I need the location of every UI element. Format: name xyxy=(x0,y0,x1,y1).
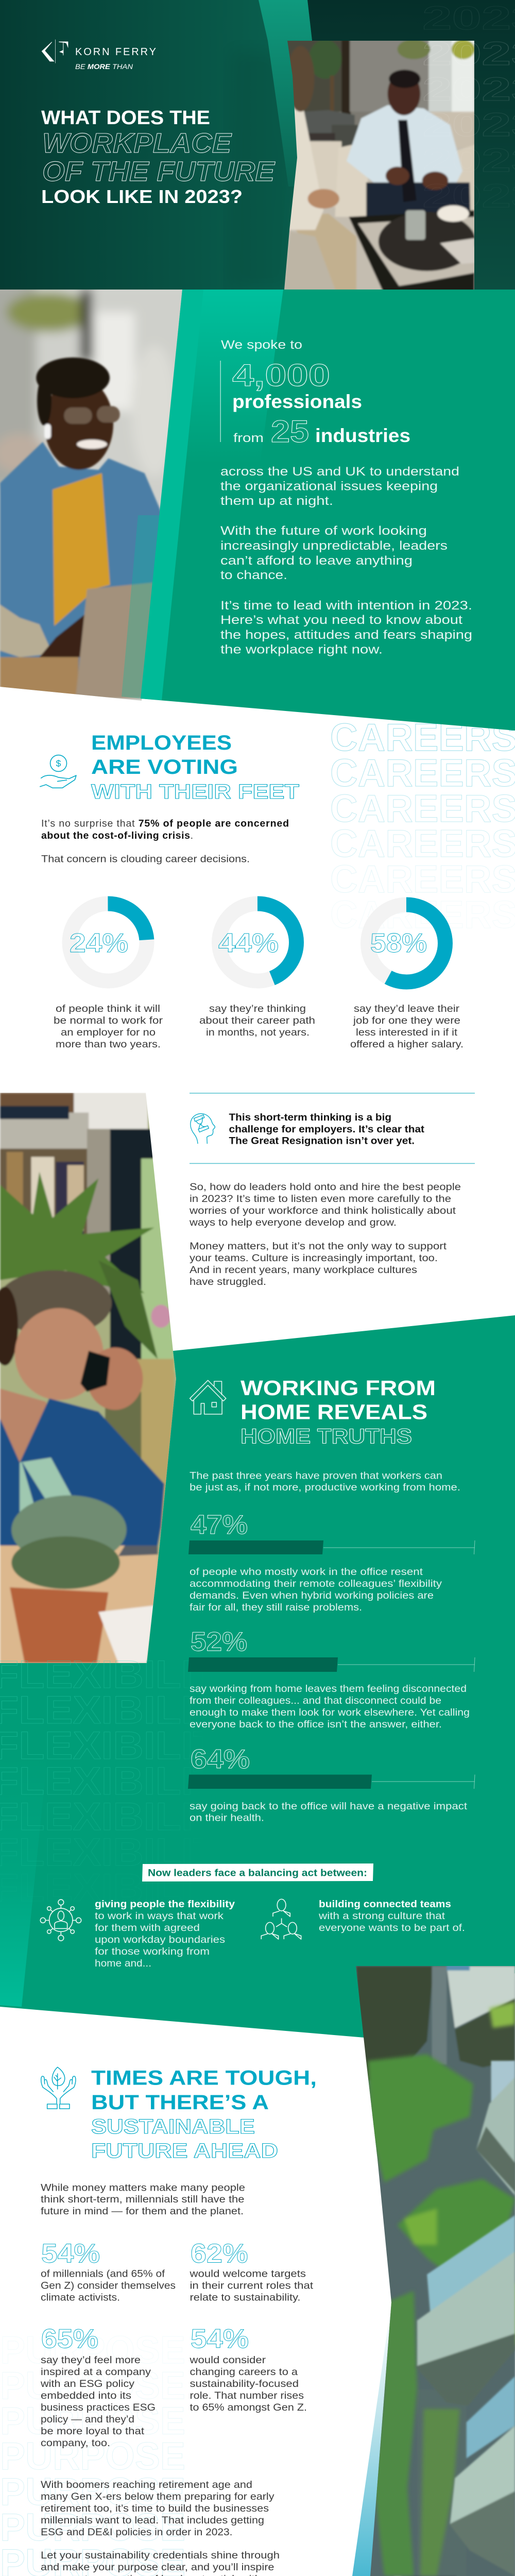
background word pattern: 2023: 2023 xyxy=(422,0,515,37)
intro text: increasingly unpredictable, leaders xyxy=(220,539,448,553)
stat: 54% changing careers xyxy=(189,2324,307,2413)
stat: 62% sustainability targets: in their current roles that xyxy=(190,2280,314,2292)
heading xyxy=(91,2067,317,2162)
title: WORKPLACE xyxy=(42,128,232,159)
intro teal wedge xyxy=(165,290,283,464)
donut chart: 58%: 58% xyxy=(370,928,427,958)
green background xyxy=(0,1315,515,2038)
text block: intro: future in mind — for them and the planet. xyxy=(41,2206,244,2217)
text block: holding onto the best people xyxy=(189,1181,461,1287)
stat: 65% ESG policy: embedded into its xyxy=(41,2390,131,2401)
stat: 54% climate activists: Gen Z) consider themselves xyxy=(41,2280,176,2292)
background word pattern: FLEXIBILITY xyxy=(0,1653,247,1910)
background word pattern: CAREERS: CAREERS xyxy=(330,893,515,936)
icon: hand holding a coin xyxy=(40,755,76,788)
intro text xyxy=(220,338,472,656)
text block: holding onto the best people: your teams. Culture is increasingly important, too. xyxy=(190,1252,438,1264)
stat: 65% ESG policy: be more loyal to that xyxy=(41,2426,145,2437)
donut chart: 44% xyxy=(218,904,297,981)
intro text: Here’s what you need to know about xyxy=(220,613,462,627)
background word pattern: 2023: 2023 xyxy=(422,106,515,143)
bar stat: 52%: everyone back to the office isn’t the answer, either. xyxy=(190,1719,442,1730)
background word pattern: 2023: 2023 xyxy=(422,35,515,72)
caption: 58%: say they’d leave their xyxy=(354,1003,460,1014)
bar stat: 64%: on their health. xyxy=(190,1812,264,1824)
panel: employees are voting xyxy=(40,732,464,1050)
bar stat: 64% xyxy=(188,1744,475,1824)
photo: green building with balconies xyxy=(345,1962,515,2576)
callout: great resignation: This short-term thinking is a big xyxy=(229,1112,391,1123)
title: OF THE FUTURE xyxy=(42,156,276,187)
caption: 58%: less interested in if it xyxy=(356,1027,458,1038)
text block: intro: While money matters make many people xyxy=(41,2182,245,2194)
balconies and glass xyxy=(416,2061,515,2576)
callout: great resignation: challenge for employers. It’s clear that xyxy=(229,1124,425,1135)
background word pattern: 2023 xyxy=(422,0,515,214)
intro text: the workplace right now. xyxy=(220,643,383,656)
icon: hand holding a coin: $ xyxy=(56,758,61,769)
blurred background xyxy=(0,290,182,701)
donut chart: 44%: 44% xyxy=(218,928,279,958)
background word pattern: CAREERS: CAREERS xyxy=(330,716,515,759)
bar stat: 47%: of people who mostly work in the office resent xyxy=(190,1566,423,1578)
title: WHAT DOES THE xyxy=(41,107,210,129)
icon: KF mark xyxy=(42,40,68,63)
panel: short-term thinking xyxy=(189,1093,475,1287)
stat: 65% ESG policy: say they’d feel more xyxy=(41,2354,141,2366)
stat: 65% ESG policy xyxy=(40,2324,156,2449)
donut chart: 24% xyxy=(70,904,147,981)
donut chart: 24%: 24% xyxy=(70,928,128,958)
stat: 54% changing careers: changing careers to a xyxy=(190,2366,298,2378)
background word pattern: PURPOSE: PURPOSE xyxy=(0,2505,185,2549)
stat: 54% changing careers: would consider xyxy=(189,2354,266,2366)
stat: 54% changing careers: sustainability-focused xyxy=(190,2378,299,2389)
intro teal strip xyxy=(141,290,203,700)
stat: 54% climate activists: 54% xyxy=(41,2239,100,2269)
hero teal strip xyxy=(259,0,312,187)
callout: great resignation: The Great Resignation isn’t over yet. xyxy=(229,1136,415,1147)
text: connected teams: building connected teams xyxy=(319,1899,451,1910)
stat: 54% climate activists: of millennials (and 65% of xyxy=(41,2268,165,2279)
text block: closing: and make your purpose clear, and you’ll inspire xyxy=(41,2562,274,2573)
bar stat: 52%: from their colleagues... and that disconnect could be xyxy=(190,1695,441,1706)
panel: hero xyxy=(0,0,515,291)
text block: closing xyxy=(41,2479,280,2576)
text block: holding onto the best people: in 2023? It’s time to listen even more carefully to the xyxy=(190,1193,451,1205)
heading: HOME REVEALS xyxy=(241,1400,427,1424)
icon: head with hourglass xyxy=(191,1114,215,1144)
hero background xyxy=(0,0,515,290)
intro text: can’t afford to leave anything xyxy=(220,554,413,568)
heading: ARE VOTING xyxy=(91,756,238,778)
heading: WORKING FROM xyxy=(241,1376,436,1400)
icon: house xyxy=(190,1380,226,1414)
caption: 44%: say they’re thinking xyxy=(209,1003,306,1014)
background word pattern: PURPOSE: PURPOSE xyxy=(0,2364,185,2407)
stat: 54% changing careers: to 65% amongst Gen Z. xyxy=(190,2402,307,2413)
background word pattern: PURPOSE: PURPOSE xyxy=(0,2328,185,2371)
intro text: the hopes, attitudes and fears shaping xyxy=(220,628,472,642)
text: connected teams xyxy=(318,1899,465,1934)
stat: 65% ESG policy: 65% xyxy=(41,2324,98,2354)
stat: 65% ESG policy: policy — and they’d xyxy=(41,2414,134,2425)
glass strip over the photo xyxy=(122,515,160,699)
caption: 44%: in months, not years. xyxy=(206,1027,310,1038)
icon: network around a person xyxy=(40,1900,81,1941)
heading: BUT THERE’S A xyxy=(91,2091,269,2114)
intro paragraph: about the cost-of-living crisis. xyxy=(41,830,193,841)
panel: sustainable future xyxy=(40,2067,317,2576)
text: flexibility: upon workday boundaries xyxy=(95,1934,225,1945)
stat: 62% sustainability targets: 62% xyxy=(191,2239,248,2269)
panel: intro xyxy=(0,282,515,731)
background word pattern: CAREERS: CAREERS xyxy=(330,787,515,830)
background word pattern: 2023: 2023 xyxy=(422,142,515,179)
stat: 65% ESG policy: company, too. xyxy=(41,2437,110,2449)
hero dark top right background xyxy=(307,0,515,290)
intro paragraph: It’s no surprise that 75% of people are concerned xyxy=(41,818,289,829)
text block: closing: retirement too, it’s time to build the businesses xyxy=(41,2503,269,2514)
background word pattern: PURPOSE: PURPOSE xyxy=(0,2434,185,2478)
caption: 58%: offered a higher salary. xyxy=(350,1039,464,1050)
text block: closing: many Gen X-ers below them preparing for early xyxy=(41,2491,274,2502)
title: LOOK LIKE IN 2023? xyxy=(41,186,243,207)
bar stat: 52% xyxy=(188,1627,475,1730)
bar stat: 47%: accommodating their remote colleagues’ flexibility xyxy=(190,1578,442,1589)
bar stat: 47%: demands. Even when hybrid working policies are xyxy=(190,1590,434,1601)
background word pattern: PURPOSE: PURPOSE xyxy=(0,2399,185,2442)
background word pattern: PURPOSE xyxy=(0,2328,185,2576)
background word pattern: 2023: 2023 xyxy=(422,71,515,108)
callout: great resignation xyxy=(190,1093,475,1164)
caption: 24%: an employer for no xyxy=(61,1027,156,1038)
heading: EMPLOYEES xyxy=(91,732,232,754)
intro text: across the US and UK to understand xyxy=(220,465,459,479)
background word pattern: CAREERS xyxy=(330,716,515,936)
bar stat: 47%: fair for all, they still raise problems. xyxy=(190,1602,362,1613)
ghosted figure behind the title xyxy=(227,52,299,289)
caption: 44% xyxy=(199,1003,315,1038)
stat: from 25 industries: from xyxy=(233,431,264,445)
bar stat: 52%: say working from home leaves them feeling disconnected xyxy=(190,1683,467,1694)
text block: intro xyxy=(41,2182,245,2217)
text: flexibility: for them with agreed xyxy=(95,1922,200,1934)
bar stat: 47% xyxy=(188,1510,475,1613)
heading: SUSTAINABLE xyxy=(91,2115,255,2138)
heading: HOME TRUTHS xyxy=(241,1424,412,1448)
text block: closing: Let your sustainability credentials shine through xyxy=(41,2550,280,2561)
text block: closing: millennials want to lead. That includes getting xyxy=(41,2515,264,2526)
title xyxy=(41,107,276,207)
caption: 58% xyxy=(350,1003,464,1050)
intro text: The past three years have proven that workers can xyxy=(190,1470,442,1482)
stat: from 25 industries xyxy=(233,414,410,449)
text block: intro: think short-term, millennials still have the xyxy=(41,2194,245,2205)
text block: holding onto the best people: So, how do leaders hold onto and hire the best people xyxy=(190,1181,461,1193)
donut chart: 58% xyxy=(368,905,445,982)
text: flexibility: to work in ways that work xyxy=(95,1910,224,1922)
stat: 62% sustainability targets: would welcome targets xyxy=(189,2268,306,2279)
heading xyxy=(91,732,299,803)
caption: 24%: be normal to work for xyxy=(54,1015,163,1026)
text block: closing: With boomers reaching retirement age and xyxy=(41,2479,252,2490)
stat: 65% ESG policy: business practices ESG xyxy=(41,2402,156,2413)
background word pattern: CAREERS: CAREERS xyxy=(330,751,515,794)
intro photo: smiling man with glasses at a laptop xyxy=(0,290,182,701)
stat: 4,000 professionals xyxy=(232,358,362,412)
text: flexibility xyxy=(95,1899,235,1969)
bar stat: 64%: 64% xyxy=(191,1744,250,1774)
caption: 44%: about their career path xyxy=(199,1015,315,1026)
corner light strip xyxy=(0,1756,47,2007)
icon: connected people xyxy=(261,1899,301,1939)
text: connected teams: with a strong culture that xyxy=(318,1910,445,1922)
text block: holding onto the best people: worries of your workforce and think holistically about xyxy=(189,1205,456,1216)
background word pattern: CAREERS: CAREERS xyxy=(330,857,515,901)
text: flexibility: for those working from xyxy=(95,1946,210,1957)
photo: woman on the phone among plants xyxy=(0,1093,184,1664)
intro text: be just as, if not more, productive working from home. xyxy=(190,1482,460,1493)
intro green background xyxy=(141,290,515,731)
caption: 24% xyxy=(54,1003,163,1050)
stat: 54% climate activists: climate activists. xyxy=(41,2292,120,2303)
stat: from 25 industries: industries xyxy=(315,425,410,446)
intro text: the organizational issues keeping xyxy=(220,479,438,494)
foliage xyxy=(368,2002,515,2576)
callout: balancing act xyxy=(142,1863,373,1882)
logo: Korn Ferry xyxy=(42,40,156,71)
background word pattern: PURPOSE: PURPOSE xyxy=(0,2470,185,2513)
intro paragraph: That concern is clouding career decisions. xyxy=(41,853,250,865)
intro text: We spoke to xyxy=(221,338,302,352)
stat: 54% changing careers: role. That number rises xyxy=(190,2390,304,2401)
bar stat: 47%: 47% xyxy=(191,1510,248,1540)
intro text: to chance. xyxy=(220,568,287,582)
stat: 65% ESG policy: inspired at a company xyxy=(41,2366,151,2378)
logo: Korn Ferry: KORN FERRY xyxy=(75,46,156,58)
stat: 54% changing careers: 54% xyxy=(191,2324,249,2354)
stat: 65% ESG policy: with an ESG policy xyxy=(40,2378,134,2389)
stat: 4,000 professionals: 4,000 xyxy=(232,358,330,393)
bar stat: 52%: 52% xyxy=(191,1627,247,1657)
text block: holding onto the best people: And in recent years, many workplace cultures xyxy=(190,1264,417,1276)
text block: closing: ESG and DE&I policies in order in 2023. xyxy=(41,2527,233,2538)
text: flexibility: giving people the flexibility xyxy=(95,1899,235,1910)
intro text: It’s time to lead with intention in 2023. xyxy=(220,599,472,613)
intro text: With the future of work looking xyxy=(220,524,427,538)
intro text xyxy=(190,1470,460,1493)
bar stat: 52%: enough to make them look for work elsewhere. Yet calling xyxy=(190,1707,470,1718)
text: flexibility: home and... xyxy=(95,1958,151,1969)
stat: from 25 industries: 25 xyxy=(271,414,309,449)
background word pattern: 2023: 2023 xyxy=(422,177,515,214)
teal strip beside the building photo xyxy=(346,2302,391,2576)
bar stat: 64%: say going back to the office will have a negative impact xyxy=(190,1801,468,1812)
text block: holding onto the best people: have struggled. xyxy=(190,1276,266,1287)
text: connected teams: everyone wants to be part of. xyxy=(319,1922,465,1934)
text block: holding onto the best people: Money matters, but it’s not the only way to support xyxy=(190,1241,447,1252)
intro paragraph xyxy=(41,818,289,865)
panel: working from home xyxy=(0,1315,515,2038)
stat: 54% climate activists xyxy=(41,2239,176,2303)
heading xyxy=(241,1376,436,1448)
stat vertical rule xyxy=(220,361,221,442)
caption: 24%: of people think it will xyxy=(56,1003,160,1014)
stat: 62% sustainability targets xyxy=(189,2239,314,2303)
intro text: them up at night. xyxy=(220,494,333,508)
heading: WITH THEIR FEET xyxy=(91,781,299,803)
caption: 24%: more than two years. xyxy=(56,1039,161,1050)
caption: 58%: job for one they were xyxy=(353,1015,460,1026)
stat: 62% sustainability targets: relate to sustainability. xyxy=(190,2292,301,2303)
callout: balancing act: Now leaders face a balancing act between: xyxy=(148,1867,367,1878)
heading: FUTURE AHEAD xyxy=(91,2140,278,2162)
text block: holding onto the best people: ways to help everyone develop and grow. xyxy=(189,1217,397,1228)
logo: Korn Ferry: BE MORE THAN xyxy=(75,62,133,71)
heading: TIMES ARE TOUGH, xyxy=(91,2067,317,2090)
icon: hands cradling a leaf xyxy=(41,2067,76,2109)
hero photo: two people in a meeting xyxy=(282,40,476,291)
stat: 4,000 professionals: professionals xyxy=(232,391,362,412)
background word pattern: CAREERS: CAREERS xyxy=(330,822,515,865)
